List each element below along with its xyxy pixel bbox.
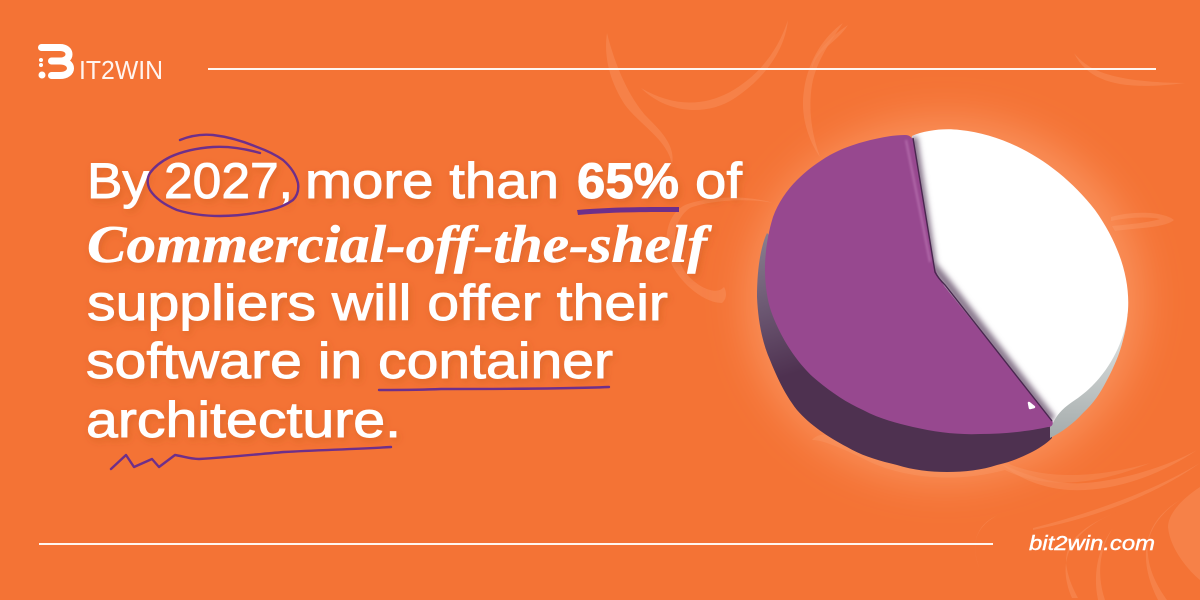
underline under 65% — [577, 207, 679, 215]
logo — [38, 48, 163, 85]
headline — [86, 153, 742, 448]
pie face: purple — [765, 135, 1053, 434]
line 1 — [87, 153, 742, 209]
line 4: software in container — [86, 333, 613, 389]
purple slice edge highlight — [906, 140, 930, 262]
purple slice dark seam — [913, 138, 1052, 421]
pie side: white — [1050, 300, 1128, 438]
pie glow — [747, 118, 1143, 482]
logo wordmark: IT2WIN — [79, 55, 163, 85]
pie face: white — [900, 129, 1128, 425]
white slice inner shadow — [913, 137, 1052, 420]
line 1: 65% — [577, 153, 679, 209]
website url: bit2win.com — [1029, 533, 1155, 555]
line 3: suppliers will offer their — [87, 275, 668, 331]
line 1: of — [695, 153, 742, 209]
line 5: architecture. — [86, 392, 401, 448]
top rule — [208, 68, 1156, 70]
line 1: more than — [305, 153, 559, 209]
decorative swirls — [606, 20, 1200, 600]
hand-drawn circle around 2027 — [148, 135, 298, 216]
line 1: By — [87, 153, 149, 209]
purple slice glint — [1029, 403, 1034, 408]
underline under container — [379, 387, 609, 390]
pie side: purple — [757, 233, 1052, 472]
line 1: 2027, — [164, 153, 293, 209]
line 2: Commercial-off-the-shelf — [87, 216, 713, 274]
zigzag underline under architecture — [111, 447, 391, 469]
3D pie chart — [757, 129, 1128, 472]
bottom rule — [39, 543, 993, 545]
logo mark — [38, 48, 70, 78]
